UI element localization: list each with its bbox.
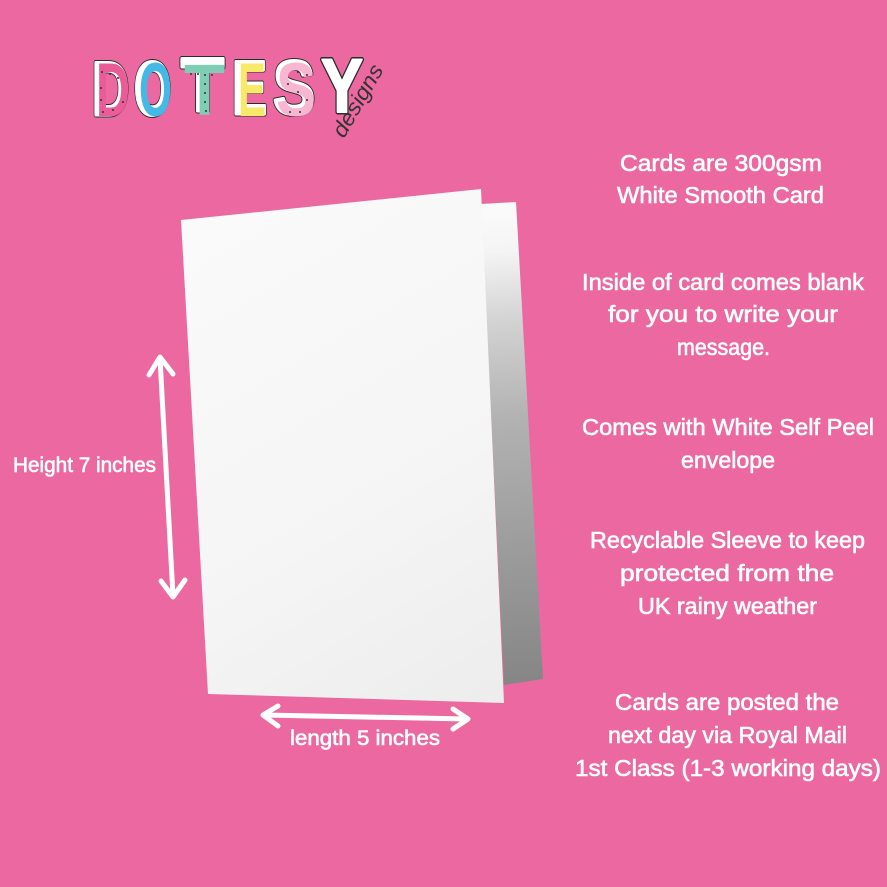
logo: Dotesy Designs (92, 43, 388, 142)
logo letter O: O (134, 47, 171, 132)
logo letter T: T (181, 43, 224, 128)
text block: envelope: envelope (681, 447, 775, 473)
logo letter S: S (276, 48, 316, 133)
logo letter D: D (96, 48, 130, 133)
text block: inside of card: Inside of card comes blank (582, 269, 865, 295)
height label: Height 7 inches (13, 454, 156, 477)
logo letter S: S (273, 46, 315, 131)
text block: inside of card (582, 269, 865, 360)
length arrow (263, 706, 468, 729)
text block: inside of card: for you to write your (608, 301, 838, 327)
text block: sleeve: protected from the (620, 560, 834, 586)
logo script: designs: designs (327, 60, 388, 142)
text block: postage: 1st Class (1-3 working days) (575, 755, 881, 781)
text block: sleeve: Recyclable Sleeve to keep (590, 527, 865, 553)
text block: envelope: Comes with White Self Peel (582, 414, 874, 440)
logo letter D: D (92, 47, 129, 132)
text block: card weight (617, 150, 824, 208)
greeting card (181, 189, 543, 703)
logo letter E (232, 46, 267, 133)
text block: sleeve: UK rainy weather (638, 593, 817, 619)
text block: postage: next day via Royal Mail (608, 722, 847, 748)
length label: length 5 inches (290, 727, 440, 750)
height arrow (149, 357, 185, 597)
text block: inside of card: message. (677, 334, 770, 360)
card front panel (181, 189, 504, 703)
logo letter Y: Y (321, 44, 363, 129)
text block: card weight: White Smooth Card (617, 182, 824, 208)
text block: sleeve (590, 527, 865, 619)
text block: postage (575, 689, 881, 781)
logo letter E: E (232, 46, 267, 131)
logo letter T: T (181, 43, 224, 128)
logo letter E: E (232, 46, 267, 131)
card back panel (481, 202, 543, 685)
logo letter O (134, 47, 172, 133)
logo letter S: S (273, 46, 315, 131)
logo letter D: D (92, 47, 129, 132)
text block: card weight: Cards are 300gsm (620, 150, 822, 176)
logo letter T: T (184, 51, 225, 131)
text block: postage: Cards are posted the (615, 689, 839, 715)
logo letter O: O (134, 47, 171, 132)
logo letter D (92, 47, 130, 133)
text block: envelope (582, 414, 874, 473)
logo letter O: O (139, 48, 172, 133)
logo letter E: E (238, 48, 266, 133)
logo letter Y: Y (321, 44, 363, 129)
